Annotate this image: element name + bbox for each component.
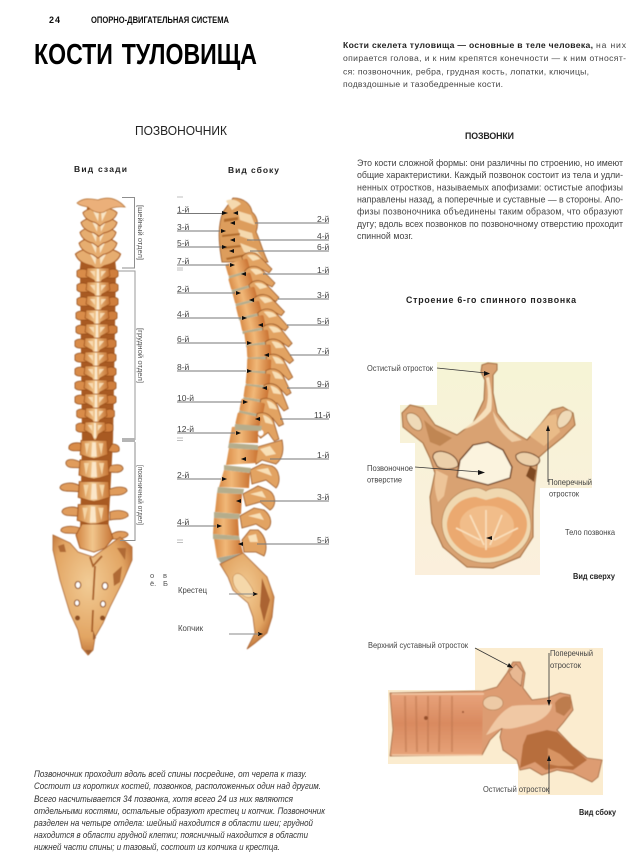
sacrum label: Крестец — [178, 586, 207, 595]
right-side vertebra labels: 3-й — [317, 290, 330, 300]
callout: spinous process (top view) — [367, 363, 490, 376]
bracket: lumbar: [поясничный отдел] — [136, 465, 145, 525]
callout: transverse process (top view) — [546, 425, 592, 498]
coccyx label — [178, 624, 259, 634]
illustration: spine side view — [213, 198, 294, 649]
left-side vertebra labels: 12-й — [177, 424, 194, 434]
heading: side view: Вид сбоку — [228, 165, 279, 175]
page header — [49, 15, 230, 25]
caption: top view: Вид сверху — [573, 571, 615, 581]
coccyx label: Копчик — [178, 624, 203, 633]
callout: vertebral foramen — [367, 463, 485, 484]
caption: side view: Вид сбоку — [579, 807, 616, 817]
left-side vertebra labels: 4-й — [177, 517, 190, 527]
sacrum label — [178, 586, 254, 595]
heading: spine: ПОЗВОНОЧНИК — [135, 124, 228, 138]
right-side vertebra labels: 3-й — [317, 492, 330, 502]
heading: structure of 6th thoracic vertebra: Строение 6-го спинного позвонка — [406, 295, 576, 305]
page header: ОПОРНО-ДВИГАТЕЛЬНАЯ СИСТЕМА — [91, 15, 230, 25]
spine description text block: разделен на четыре отдела: шейный находится в области шеи; грудной — [33, 818, 313, 828]
page header: 24 — [49, 15, 60, 25]
intro text block: на них — [596, 40, 627, 50]
callout: vertebral body: Тело позвонка — [565, 527, 615, 537]
vertebrae text block: физы позвоночника объединены таким образом, что образуют — [357, 206, 623, 216]
right-side vertebra labels: 4-й — [317, 231, 330, 241]
heading: back view: Вид сзади — [74, 164, 127, 174]
callout: spinous process (side view): Остистый отросток — [483, 784, 549, 794]
spine description text block: находится в области грудной клетки; поясничный находится в области — [34, 830, 308, 840]
right-side vertebra labels: 5-й — [317, 316, 330, 326]
illustration: vertebra side view — [388, 648, 603, 795]
callout: superior articular process — [368, 640, 513, 668]
small key letters — [150, 571, 168, 588]
bracket: cervical — [122, 198, 145, 268]
bracket: thoracic — [118, 271, 145, 442]
illustration: spine back view — [53, 198, 132, 655]
small key letters: Б — [163, 579, 168, 588]
title: КОСТИ ТУЛОВИЩА — [34, 39, 257, 71]
intro text block: опирается голова, и к ним крепятся конечности — к ним относят- — [343, 53, 626, 63]
callout: spinous process (top view): Остистый отросток — [367, 363, 433, 373]
callout: vertebral foramen: отверстие — [367, 474, 402, 484]
right-side vertebra labels: 7-й — [317, 346, 330, 356]
vertebrae text block: направлены назад, а поперечные и суставные — в стороны. Апо- — [357, 194, 623, 204]
illustration: vertebra top view — [400, 362, 592, 575]
spine description text block: Позвоночник проходит вдоль всей спины посредине, от черепа к тазу. — [34, 769, 307, 779]
intro text block: ся: позвоночник, ребра, грудная кость, лопатки, ключицы, — [343, 66, 589, 76]
right-side vertebra labels: 5-й — [317, 535, 330, 545]
bracket: lumbar — [120, 442, 145, 540]
intro text block: Кости скелета туловища — основные в теле человека, — [343, 40, 593, 50]
intro text block: подвздошные и тазобедренные кости. — [343, 79, 503, 89]
small key letters: в — [163, 571, 167, 580]
left-side vertebra labels: 2-й — [177, 284, 190, 294]
right-side vertebra labels: 2-й — [317, 214, 330, 224]
left-side vertebra labels: 7-й — [177, 256, 190, 266]
callout: transverse process (side view): отросток — [550, 660, 581, 670]
black arrowheads on side view — [217, 211, 269, 636]
spine description text block: нижней части спины; и тазовый, состоит из копчика и крестца. — [34, 842, 280, 852]
vertebrae text block: дугу; вдоль всех позвонков по позвоночному отверстию проходит — [357, 219, 623, 229]
spine description text block: Состоит из коротких костей, позвонков, расположенных один над другим. — [34, 781, 321, 791]
left-side vertebra labels: 6-й — [177, 334, 190, 344]
callout: transverse process (side view) — [547, 648, 593, 706]
callout: vertebral body — [486, 527, 615, 540]
callout: vertebral foramen: Позвоночное — [367, 463, 413, 473]
callout: superior articular process: Верхний суставный отросток — [368, 640, 468, 650]
heading: vertebrae: ПОЗВОНКИ — [465, 131, 514, 141]
spine description text block: Всего насчитывается 34 позвонка, хотя всего 24 из них являются — [34, 794, 293, 804]
right-side vertebra labels: 11-й — [314, 410, 331, 420]
small key letters: ё. — [150, 579, 156, 588]
left-side vertebra labels — [177, 197, 246, 542]
intro text block — [343, 40, 627, 89]
spine description text block — [33, 769, 326, 852]
right-side vertebra labels: 1-й — [317, 450, 330, 460]
spine description text block: отдельными костями, остальные образуют крестец и копчик. Позвоночник — [34, 806, 326, 816]
left-side vertebra labels: 10-й — [177, 393, 194, 403]
vertebrae text block: Это кости сложной формы: они различны по строению, но имеют — [357, 158, 623, 168]
vertebrae text block: ненных отростков, называемых апофизами: остистые апофизы — [357, 182, 623, 192]
left-side vertebra labels: 2-й — [177, 470, 190, 480]
right-side vertebra labels: 1-й — [317, 265, 330, 275]
vertebrae text block: общие характеристики. Каждый позвонок состоит из тела и удли- — [357, 170, 623, 180]
left-side vertebra labels: 3-й — [177, 222, 190, 232]
right-side vertebra labels — [247, 214, 331, 545]
bracket: cervical: [шейный отдел] — [136, 205, 145, 260]
callout: spinous process (side view) — [483, 755, 551, 794]
right-side vertebra labels: 6-й — [317, 242, 330, 252]
callout: transverse process (top view): Поперечный — [548, 477, 592, 487]
left-side vertebra labels: 4-й — [177, 309, 190, 319]
left-side vertebra labels: 5-й — [177, 238, 190, 248]
vertebrae text block: спинной мозг. — [357, 231, 413, 241]
small key letters: о — [150, 571, 154, 580]
vertebrae text block — [357, 158, 623, 241]
left-side vertebra labels: 8-й — [177, 362, 190, 372]
left-side vertebra labels: 1-й — [177, 204, 190, 214]
callout: transverse process (top view): отросток — [549, 488, 579, 498]
bracket: thoracic: [грудной отдел] — [136, 328, 145, 383]
right-side vertebra labels: 9-й — [317, 379, 330, 389]
callout: transverse process (side view): Поперечный — [550, 648, 593, 658]
